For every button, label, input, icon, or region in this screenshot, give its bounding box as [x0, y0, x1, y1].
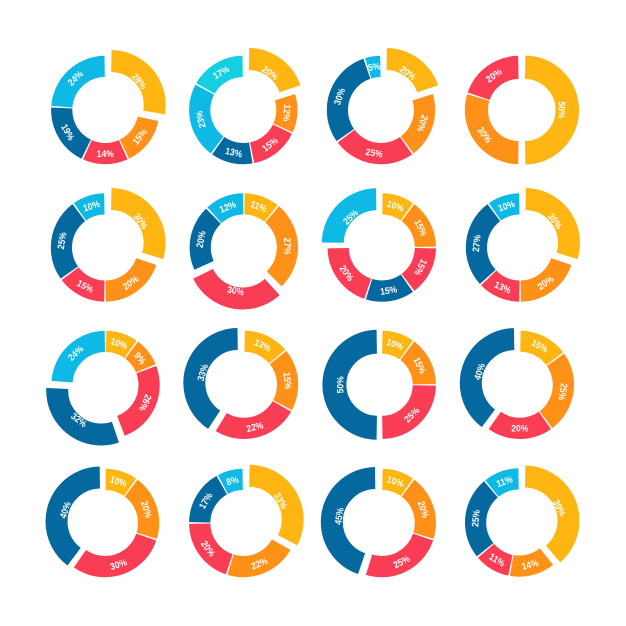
segment: blue 32% exploded: 32% [69, 411, 89, 429]
chart 7: donut 10 15 15 15 20 25 [333, 198, 429, 297]
chart 8: donut 30 20 13 27 10 [471, 198, 569, 296]
chart 16: donut 39 14 11 25 11 [470, 474, 568, 572]
segment: turquoise 17%: 17% [211, 64, 231, 81]
chart 2: donut 20 12 15 13 23 17 [194, 59, 293, 160]
segment: blue 27%: 27% [471, 234, 483, 252]
segment: cyan 25% exploded: 25% [341, 207, 360, 227]
chart 13: donut 10 20 30 40 [56, 474, 154, 572]
segment: orange 27%: 27% [282, 237, 293, 255]
segment: orange 20%: 20% [536, 274, 556, 292]
segment: red 20%: 20% [199, 539, 217, 559]
segment: red 14%: 14% [97, 148, 114, 159]
segment: cyan 23%: 23% [194, 110, 208, 129]
segment: cyan 24%: 24% [66, 344, 85, 363]
segment: cyan 10%: 10% [82, 198, 101, 214]
segment: yellow 10%: 10% [386, 474, 405, 489]
segment: blue 20%: 20% [194, 230, 208, 249]
segment: red 20%: 20% [511, 423, 528, 434]
segment: red 13%: 13% [493, 279, 513, 296]
segment: orange 15%: 15% [281, 372, 293, 390]
segment: red 25%: 25% [402, 405, 422, 425]
segment: blue 25%: 25% [470, 509, 482, 527]
chart 10: donut 13 15 22 33 [194, 337, 293, 434]
segment: blue 30%: 30% [332, 87, 347, 106]
segment: red 20%: 20% [484, 66, 504, 85]
segment: yellow 30% exploded: 30% [546, 211, 564, 231]
chart 1: donut 28 15 14 19 24 [59, 61, 155, 159]
segment: yellow 10%: 10% [386, 198, 405, 214]
segment: yellow 11%: 11% [249, 199, 268, 214]
segment: red 20%: 20% [337, 263, 356, 283]
segment: orange 30%: 30% [475, 125, 494, 145]
segment: orange 12%: 12% [281, 104, 293, 122]
segment: red 15%: 15% [260, 135, 280, 154]
chart 14: donut 33 22 20 17 8 [197, 474, 293, 572]
segment: orange 20%: 20% [416, 500, 431, 519]
segment: blue 33% exploded: 33% [195, 363, 210, 382]
segment: orange 15%: 15% [130, 127, 149, 147]
segment: yellow 20% exploded: 20% [260, 64, 280, 82]
segment: orange 14%: 14% [520, 558, 540, 572]
segment: orange 22%: 22% [249, 556, 269, 572]
chart 4: donut 50 30 20 [475, 66, 567, 153]
segment: orange 9%: 9% [132, 350, 148, 366]
segment: orange 15%: 15% [411, 355, 428, 375]
segment: blue 40% exploded: 40% [58, 500, 73, 520]
segment: red 25%: 25% [392, 553, 412, 570]
segment: cyan 10%: 10% [497, 198, 516, 214]
chart 11: donut 10 15 25 50 [334, 337, 428, 428]
segment: blue 40% exploded: 40% [472, 362, 487, 381]
segment: yellow 39% exploded: 39% [551, 498, 568, 518]
segment: red 26%: 26% [137, 393, 154, 413]
segment: red 15%: 15% [412, 257, 429, 277]
segment: cyan 12%: 12% [218, 199, 238, 215]
segment: red 25%: 25% [365, 147, 383, 160]
segment: cyan 5%: 5% [367, 61, 381, 73]
segment: yellow 50% exploded: 50% [556, 101, 567, 119]
segment: cyan 11%: 11% [495, 474, 514, 489]
segment: yellow 10%: 10% [109, 336, 129, 351]
segment: yellow 10%: 10% [385, 337, 405, 352]
chart 15: donut 10 20 25 45 [332, 474, 431, 570]
chart 6: donut 11 27 30 20 12 [194, 199, 293, 298]
segment: red 30%: 30% [109, 557, 128, 572]
segment: yellow 10%: 10% [109, 474, 128, 489]
segment: blue 50% exploded: 50% [335, 376, 346, 393]
segment: blue 15%: 15% [379, 284, 398, 297]
segment: orange 25%: 25% [556, 382, 569, 401]
segment: orange 20%: 20% [415, 114, 430, 133]
segment: red 30% exploded: 30% [226, 284, 245, 298]
segment: blue 19%: 19% [59, 122, 77, 142]
chart 3: donut 20 20 25 30 5 [332, 59, 430, 160]
segment: yellow 15%: 15% [530, 337, 550, 355]
segment: orange 15%: 15% [412, 218, 429, 238]
segment: orange 20%: 20% [121, 274, 141, 292]
segment: orange 20%: 20% [139, 500, 154, 519]
segment: blue 25%: 25% [55, 231, 68, 250]
segment: red 11%: 11% [487, 551, 507, 569]
segment: yellow 28% exploded: 28% [130, 71, 149, 91]
segment: cyan 24%: 24% [66, 69, 85, 88]
segment: yellow 30% exploded: 30% [131, 211, 150, 231]
segment: yellow 13%: 13% [253, 337, 273, 354]
segment: red 15%: 15% [75, 278, 95, 295]
segment: blue 45% exploded: 45% [333, 507, 346, 525]
segment: blue 13%: 13% [224, 146, 243, 160]
chart 9: donut 10 9 26 32 24 [57, 336, 154, 434]
segment: yellow 33% exploded: 33% [272, 491, 289, 511]
segment: blue 17%: 17% [197, 491, 215, 511]
chart 12: donut 15 25 20 40 [471, 337, 569, 434]
chart 5: donut 30 20 15 25 10 [55, 198, 155, 295]
segment: yellow 20% exploded: 20% [398, 64, 418, 82]
segment: red 22%: 22% [245, 420, 264, 434]
segment: cyan 8%: 8% [225, 474, 240, 487]
